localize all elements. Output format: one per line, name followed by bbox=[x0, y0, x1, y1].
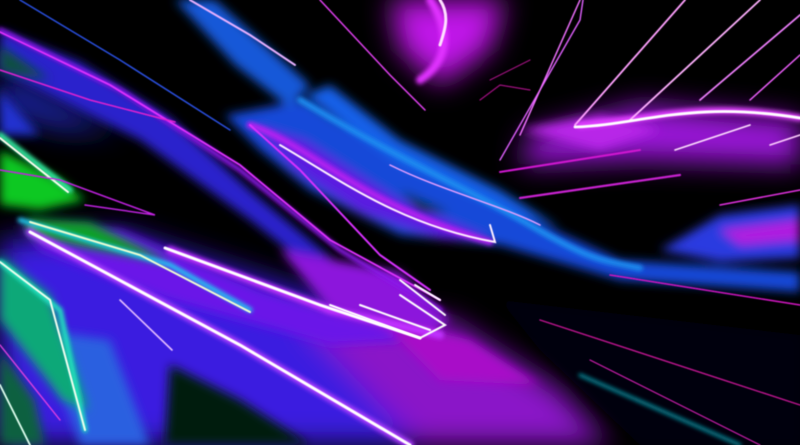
white burst at ribbon tip bbox=[330, 280, 445, 338]
dark pockets bbox=[165, 300, 800, 445]
green and cyan glow bbox=[0, 45, 170, 445]
